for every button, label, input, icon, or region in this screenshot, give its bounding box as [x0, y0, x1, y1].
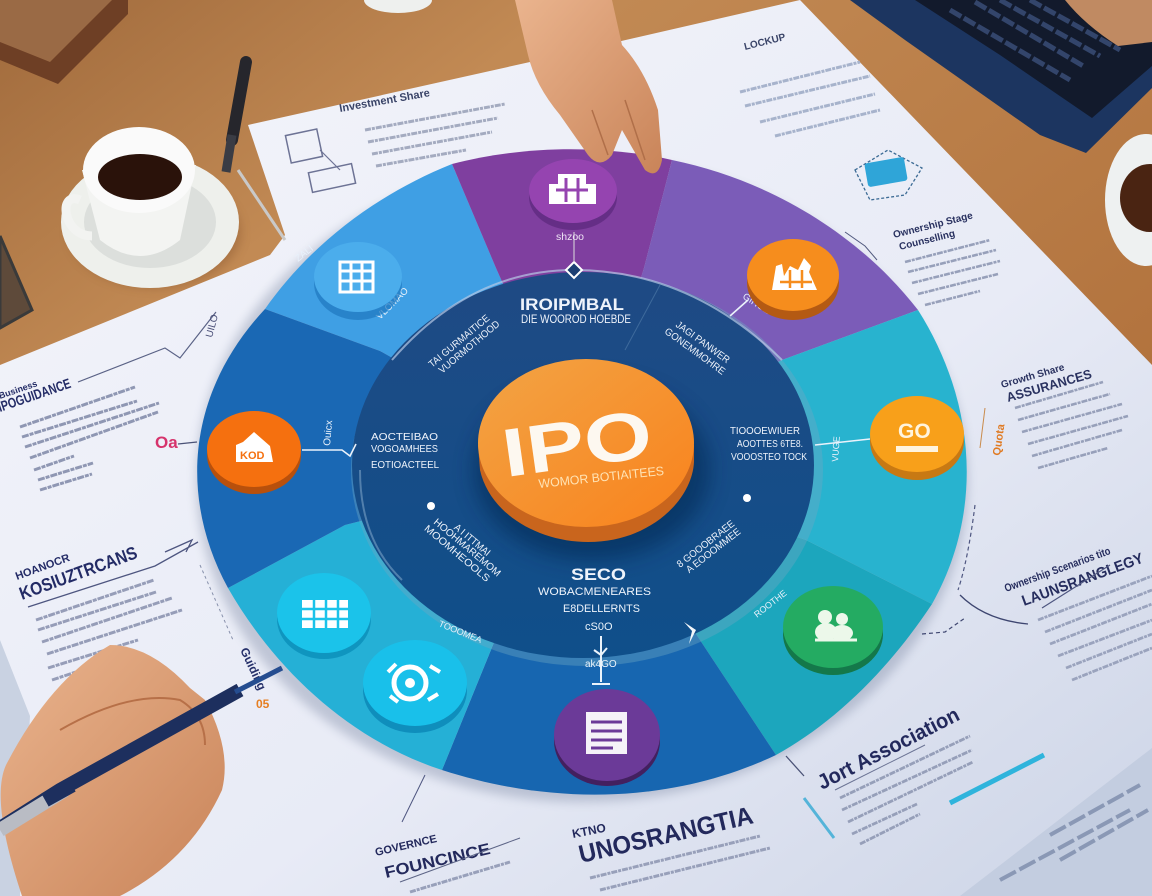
side block: left lower: Guiding — [237, 645, 269, 692]
inner heading bottom: E8DELLERNTS — [563, 603, 640, 615]
side block: bottom right — [786, 703, 1044, 844]
bottom connector — [585, 621, 617, 684]
inner label lower left: MOOMHEOOLS — [422, 523, 492, 585]
IPO subtitle: WOMOR BOTIAITEES — [538, 464, 665, 491]
laptop top right — [850, 0, 1152, 153]
label top segment: shzoo — [556, 231, 584, 243]
inner label left: EOTIOACTEEL — [371, 459, 439, 471]
inner label right: TIOOOEWIUER — [730, 425, 800, 437]
side block: right middle: Growth Share — [1000, 362, 1066, 391]
inner label left — [371, 431, 439, 471]
side block: bottom left center — [374, 775, 520, 892]
inner label lower left — [422, 508, 508, 588]
hand top center — [515, 0, 662, 173]
label light blue segment: VLOMAO — [374, 286, 411, 322]
side block: right upper — [845, 210, 1000, 305]
inner label left: AOCTEIBAO — [371, 431, 438, 443]
side block: right middle: Quota — [991, 422, 1008, 456]
side block: right middle: ASSURANCES — [1005, 366, 1094, 405]
inner label upper left: TAI GURMAITICE — [427, 313, 492, 370]
inner heading bottom: SECO — [571, 566, 626, 584]
icon: house, dark purple — [529, 159, 617, 230]
inner heading bottom: WOBACMENEARES — [538, 586, 651, 598]
IPO title: IPO — [498, 396, 657, 492]
label lower left segment: TOOOMEA — [437, 619, 484, 645]
inner label lower left: HOOHMAREMOM — [431, 517, 502, 579]
inner heading top: IROIPMBAL — [520, 296, 624, 314]
top sheet notes and diagram: Investment Share — [338, 87, 431, 115]
side block: left lower — [14, 540, 270, 711]
pen on desk — [226, 62, 285, 240]
side block: right lower — [922, 505, 1152, 680]
side block: left upper: UILO — [204, 313, 221, 339]
book top left — [0, 0, 128, 84]
side block: bottom center: KTNO — [571, 821, 607, 841]
side block: bottom right: Jort Association — [814, 703, 963, 794]
icon: document, purple bottom — [554, 689, 660, 786]
inner label upper right: GONEMMOHRE — [662, 326, 727, 378]
inner label right: VOOOSTEO TOCK — [731, 451, 807, 463]
inner labels — [371, 296, 807, 615]
ring connector node top — [566, 232, 582, 278]
segment: dark purple top — [452, 149, 672, 465]
segment: light blue top left — [265, 164, 583, 465]
side block: right upper: Counselling — [898, 228, 956, 253]
side block: left lower: KOSIUZTRCANS — [17, 543, 140, 604]
bottom connector: ak4GO — [585, 659, 617, 670]
inner navy circle — [351, 270, 823, 666]
top sheet notes and diagram: LOCKUP — [743, 32, 787, 53]
mug top edge — [364, 0, 432, 13]
icon: gear, cyan lower — [363, 640, 467, 733]
icon: house, orange left: KOD — [240, 450, 264, 462]
label purple segment: GIHOE — [740, 291, 772, 317]
side block: left lower: HOANOCR — [14, 552, 71, 583]
coffee cup and saucer — [61, 127, 241, 288]
icon: people, green — [783, 586, 883, 675]
inner heading top: DIE WOOROD HOEBDE — [521, 314, 631, 326]
side block: right upper: Ownership Stage — [892, 210, 974, 241]
side block: bottom left center: FOUNCINCE — [383, 841, 492, 882]
side block: bottom center: UNOSRANGTIA — [576, 802, 756, 869]
bottom connector: cS0O — [585, 621, 613, 633]
inner ring dots — [427, 494, 751, 510]
segment: light purple top right — [583, 160, 918, 465]
segment: teal lower right — [583, 465, 932, 755]
segment: blue bottom — [442, 465, 776, 795]
label right lower segment: ROOTHE — [752, 588, 789, 620]
inner label lower right: 8 GOOOBRAEE — [675, 518, 737, 570]
lower right overlapping sheet — [960, 748, 1152, 896]
side block: right middle — [980, 362, 1128, 468]
inner label upper left: VUORMOTHOOD — [437, 319, 502, 376]
icon: building, light blue — [314, 242, 402, 320]
icon: house, orange left — [207, 411, 301, 494]
segment: teal right — [583, 310, 967, 604]
side block: right lower: LAUNSRANGLEGY — [1020, 550, 1146, 610]
inner label right — [730, 425, 807, 463]
center orange IPO disc — [474, 359, 710, 560]
segment: blue left — [197, 309, 583, 588]
phone at left edge — [0, 236, 32, 328]
label left connector: Ouicx — [322, 420, 335, 446]
top sheet notes and diagram — [285, 32, 922, 200]
side block: left upper: Oa — [155, 433, 178, 452]
inner heading top — [520, 296, 631, 326]
label right connector: VUGE — [830, 436, 842, 462]
inner label right: AOOTTES 6TE8. — [737, 438, 803, 450]
inner label upper right: JAGI PANWER — [673, 320, 731, 366]
hand and pen bottom left — [0, 645, 282, 896]
side block: left lower: 05 — [256, 697, 270, 711]
white chevron marker — [684, 622, 696, 644]
icon: GO badge, orange right: GO — [898, 420, 931, 443]
side block: bottom left center: GOVERNCE — [374, 833, 438, 859]
segment: cyan lower left — [228, 465, 583, 770]
inner label lower right: A EOOOMMEE — [684, 526, 743, 576]
circular wheel diagram — [196, 149, 968, 802]
icon: GO badge, orange right — [870, 396, 964, 480]
bowl at right edge — [1105, 134, 1152, 266]
icon: factory, orange — [747, 239, 839, 320]
label outer light blue: ZALI — [293, 243, 316, 264]
inner label lower left: A I ITTMAI — [451, 522, 492, 559]
inner label left: VOGOAMHEES — [371, 443, 438, 455]
side block: left upper — [0, 312, 221, 490]
icon: bank, cyan upper — [277, 573, 371, 659]
inner heading bottom — [538, 566, 651, 615]
side block: right lower: Ownership Scenarios tito — [1003, 545, 1112, 595]
connectors and small segment labels — [302, 300, 870, 456]
